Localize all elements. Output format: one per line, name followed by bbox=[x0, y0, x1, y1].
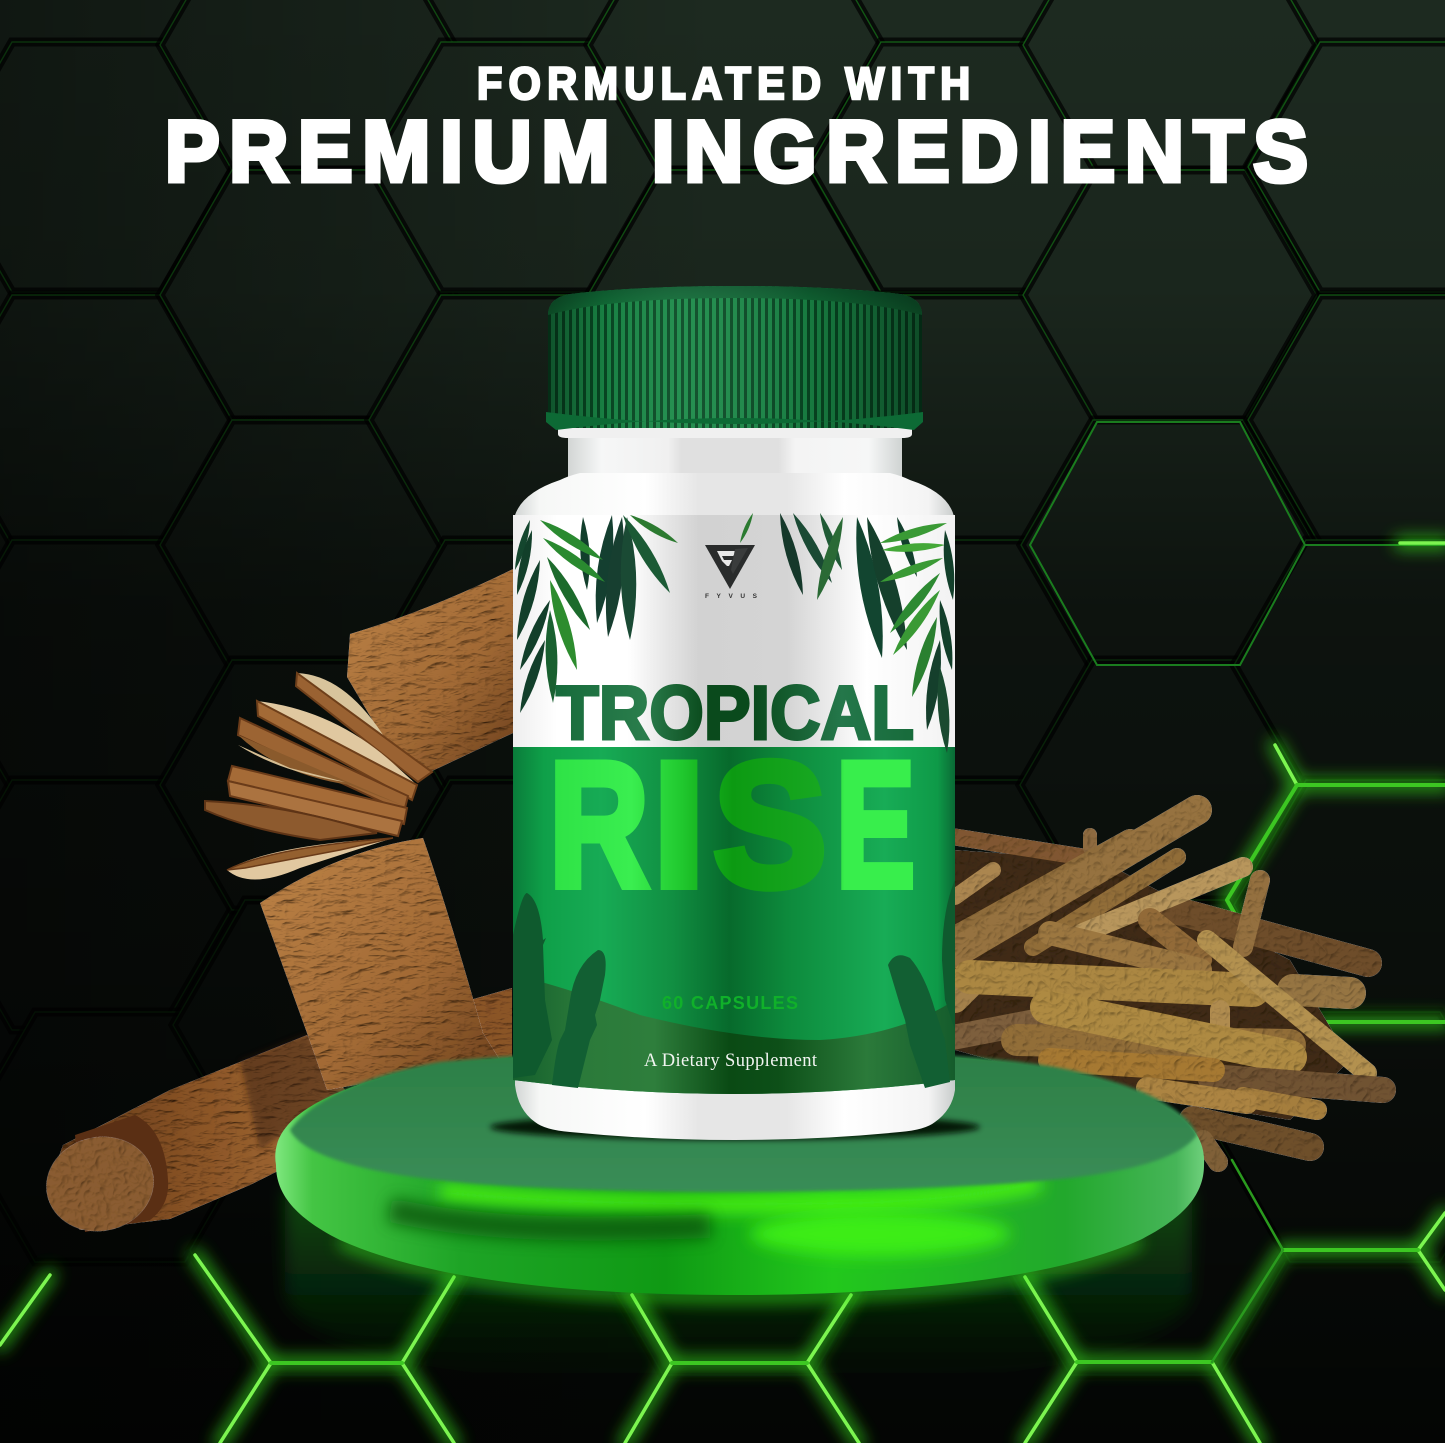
product name rise: E bbox=[836, 725, 915, 924]
podium bright lower highlight bbox=[750, 1212, 1010, 1256]
lower root bbox=[47, 1035, 345, 1230]
podium dark band bbox=[390, 1210, 710, 1229]
product name rise: R bbox=[549, 725, 649, 924]
ingredient: ashwagandha root sticks bbox=[955, 810, 1383, 1162]
root slices bbox=[205, 673, 432, 880]
podium outer glow bbox=[340, 1240, 1140, 1296]
podium highlight band bbox=[440, 1182, 1040, 1204]
banana leaf left bbox=[513, 893, 606, 1088]
leaves top left bbox=[512, 512, 680, 715]
product name tropical: TROPICAL bbox=[556, 671, 914, 756]
product name rise: I bbox=[652, 725, 706, 924]
neck rim bbox=[558, 418, 912, 438]
podium top face bbox=[290, 1050, 1197, 1192]
root cut end bbox=[37, 1127, 163, 1241]
cap bbox=[546, 286, 923, 430]
leaf top centre bbox=[738, 512, 755, 544]
root collar bbox=[75, 1115, 168, 1232]
heading line 1: FORMULATED WITH bbox=[477, 59, 970, 109]
banana leaf right bbox=[888, 880, 955, 1088]
upper root piece bbox=[347, 569, 513, 772]
supplement line: A Dietary Supplement bbox=[644, 1051, 818, 1071]
label hill bbox=[513, 975, 955, 1094]
bottle shoulder and body bbox=[513, 473, 955, 1140]
leaves top right bbox=[775, 511, 957, 753]
capsule count: 60 CAPSULES bbox=[662, 993, 798, 1013]
right stub behind lower trunk bbox=[470, 988, 512, 1060]
product bottle bbox=[512, 286, 957, 1140]
podium side bbox=[275, 1050, 1204, 1295]
heading line 2: PREMIUM INGREDIENTS bbox=[165, 103, 1308, 199]
podium reflection bbox=[285, 1190, 1192, 1390]
bottle neck bbox=[568, 432, 902, 480]
title bbox=[165, 59, 1308, 199]
middle root piece bbox=[260, 838, 500, 1090]
label white section bbox=[513, 515, 955, 747]
brand logo bbox=[705, 545, 758, 600]
brand logo: FYVUS bbox=[705, 593, 758, 600]
ingredient: cassava root bbox=[37, 569, 513, 1241]
bottle shadow bbox=[490, 1114, 980, 1140]
label green section bbox=[513, 747, 955, 1094]
product name rise bbox=[549, 725, 915, 924]
product name rise: S bbox=[713, 725, 827, 924]
neon glowing hexagon edges bbox=[0, 543, 1445, 1443]
podium bbox=[275, 1050, 1204, 1296]
junction shadow bbox=[240, 1033, 345, 1150]
